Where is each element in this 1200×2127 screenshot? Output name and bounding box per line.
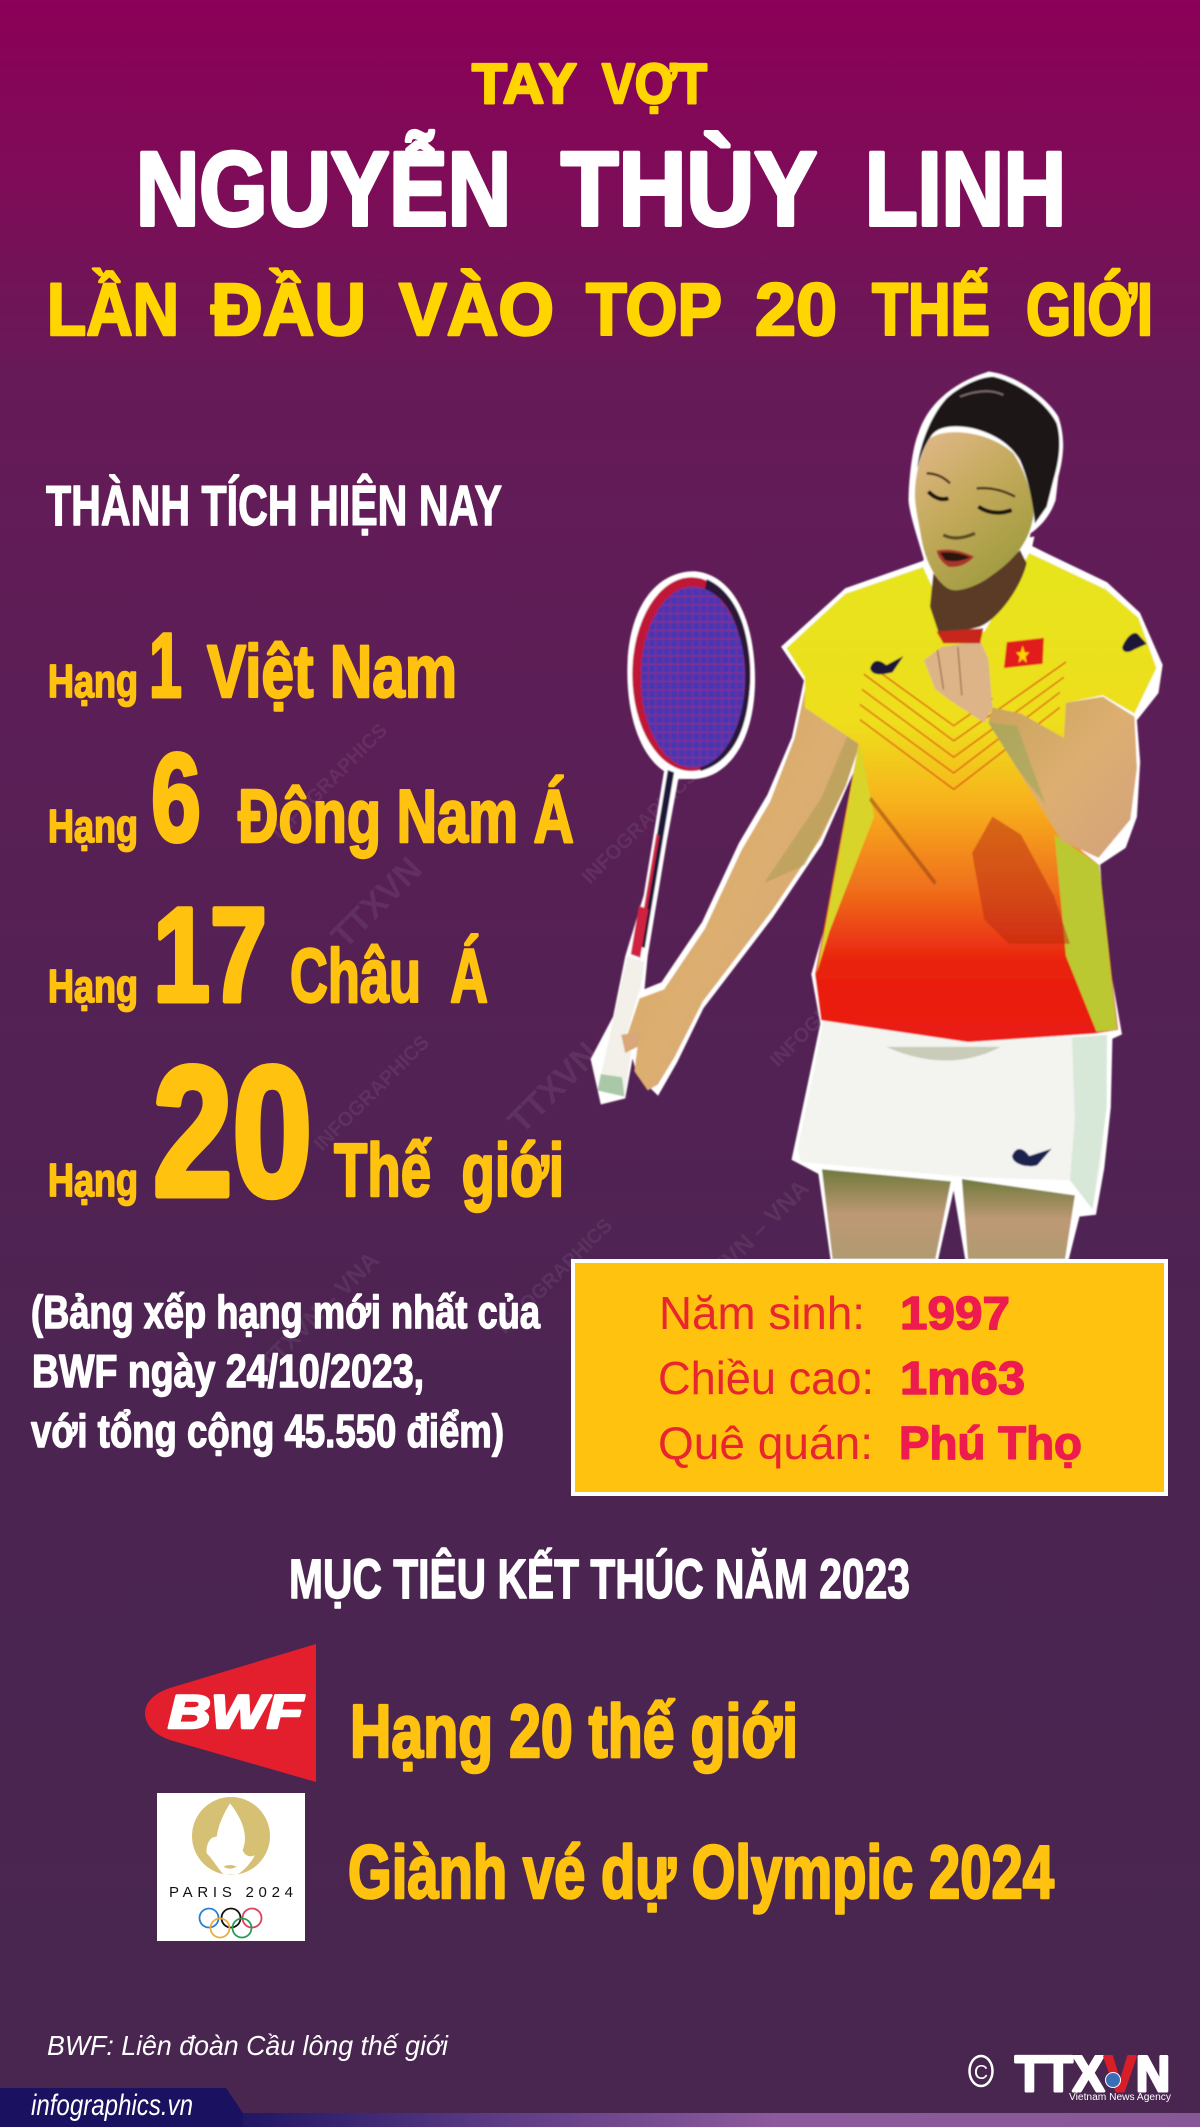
- rank 17 Asia: [48, 881, 488, 1030]
- birth year: [659, 1287, 1010, 1339]
- player photo illustration: [591, 372, 1162, 1259]
- icon: BWF logo: BWF: [168, 1685, 305, 1738]
- rank 1 Vietnam: Việt Nam: [207, 630, 457, 713]
- title line: first top 20: TOP: [586, 268, 722, 351]
- title: [47, 52, 1153, 351]
- watermarks: INFOGRAPHICS: [493, 1215, 617, 1339]
- watermarks: TTXVN – VNA: [255, 1247, 385, 1376]
- title line: athlete name: THÙY: [561, 131, 817, 248]
- info box: personal details: [573, 1261, 1166, 1494]
- title line: first top 20: GIỚI: [1026, 268, 1153, 351]
- title line: first top 20: [47, 268, 1153, 351]
- right arm and fist: [924, 641, 1137, 858]
- heading: current achievements: THÀNH TÍCH HIỆN NAY: [46, 473, 502, 538]
- rank 1 Vietnam: 1: [149, 615, 182, 717]
- rank 17 Asia: Châu Á: [290, 934, 488, 1019]
- watermarks: INFOGRAPHICS: [268, 720, 392, 844]
- height: 1m63: [900, 1352, 1025, 1404]
- rank 17 Asia: Hạng: [48, 960, 138, 1012]
- legs: [822, 1169, 1075, 1259]
- rank 6 Southeast Asia: Đông Nam Á: [238, 774, 574, 858]
- yonex logos and flag: [870, 633, 1147, 674]
- heading: goals for end of 2023: MỤC TIÊU KẾT THÚC NĂM 2023: [289, 1547, 910, 1610]
- title line: athlete name: [136, 130, 1066, 248]
- logo: TTXVN copyright: C: [974, 2062, 988, 2084]
- head: [908, 372, 1063, 643]
- icon: BWF logo: [145, 1644, 316, 1782]
- note: ranking source: BWF ngày 24/10/2023,: [32, 1345, 424, 1397]
- hometown: Phú Thọ: [899, 1417, 1082, 1469]
- title line: athlete name: NGUYỄN: [136, 130, 511, 248]
- rank 20 world: Hạng: [48, 1154, 138, 1206]
- rank 20 world: Thế giới: [334, 1128, 564, 1212]
- watermarks: TTXVN – VNA: [685, 1175, 815, 1304]
- title line: first top 20: VÀO: [399, 268, 554, 351]
- note: ranking source: (Bảng xếp hạng mới nhất của: [31, 1286, 540, 1338]
- rank 6 Southeast Asia: [48, 729, 574, 868]
- rank list: [48, 615, 574, 1234]
- height: Chiều cao:: [658, 1352, 874, 1404]
- rank 20 world: [48, 1028, 564, 1234]
- body silhouette outline: [627, 538, 1162, 1259]
- hometown: [658, 1417, 1082, 1469]
- title line: athlete name: LINH: [865, 131, 1066, 248]
- racket: [591, 571, 755, 1104]
- watermarks: INFOGRAPHICS: [578, 765, 702, 889]
- watermarks: [255, 720, 890, 1376]
- title line: first top 20: ĐẦU: [211, 268, 366, 351]
- skirt: [797, 1020, 1108, 1209]
- title line: first top 20: 20: [755, 268, 837, 351]
- jersey: [786, 553, 1156, 1042]
- goal: rank 20 world: Hạng 20 thế giới: [350, 1689, 798, 1773]
- site name: infographics.vn: [31, 2089, 193, 2122]
- watermarks: INFOGRAPHICS: [310, 1032, 434, 1156]
- rank 6 Southeast Asia: 6: [151, 729, 201, 868]
- rank 1 Vietnam: Hạng: [48, 655, 138, 707]
- logo: TTXVN copyright: TTXVN: [1015, 2046, 1170, 2102]
- hometown: Quê quán:: [658, 1417, 873, 1469]
- title line: first top 20: LẦN: [47, 268, 179, 351]
- icon: Paris 2024 logo: [157, 1793, 305, 1941]
- watermarks: INFOGRAPHICS: [766, 948, 890, 1072]
- watermarks: TTXVN: [324, 850, 429, 956]
- note: ranking source: [31, 1286, 540, 1457]
- title line: first top 20: THẾ: [872, 268, 990, 351]
- footer band: [0, 2088, 1200, 2127]
- rank 6 Southeast Asia: Hạng: [48, 800, 138, 852]
- watermarks: TTXVN: [501, 1035, 606, 1141]
- icon: Paris 2024 logo: PARIS 2024: [169, 1884, 293, 1901]
- logo: TTXVN copyright: Vietnam News Agency: [1069, 2092, 1171, 2103]
- height: [658, 1352, 1025, 1404]
- left arm: [621, 680, 860, 1091]
- title line: tay vợt: VỢT: [602, 52, 707, 116]
- footnote: BWF definition: BWF: Liên đoàn Cầu lông thế giới: [47, 2030, 449, 2061]
- birth year: Năm sinh:: [659, 1287, 865, 1339]
- rank 1 Vietnam: [48, 615, 457, 717]
- title line: tay vợt: [472, 52, 707, 116]
- rank 17 Asia: 17: [153, 881, 267, 1030]
- note: ranking source: với tổng cộng 45.550 điểm): [31, 1405, 504, 1457]
- title line: tay vợt: TAY: [472, 52, 577, 116]
- birth year: 1997: [900, 1287, 1010, 1339]
- rank 20 world: 20: [153, 1028, 312, 1234]
